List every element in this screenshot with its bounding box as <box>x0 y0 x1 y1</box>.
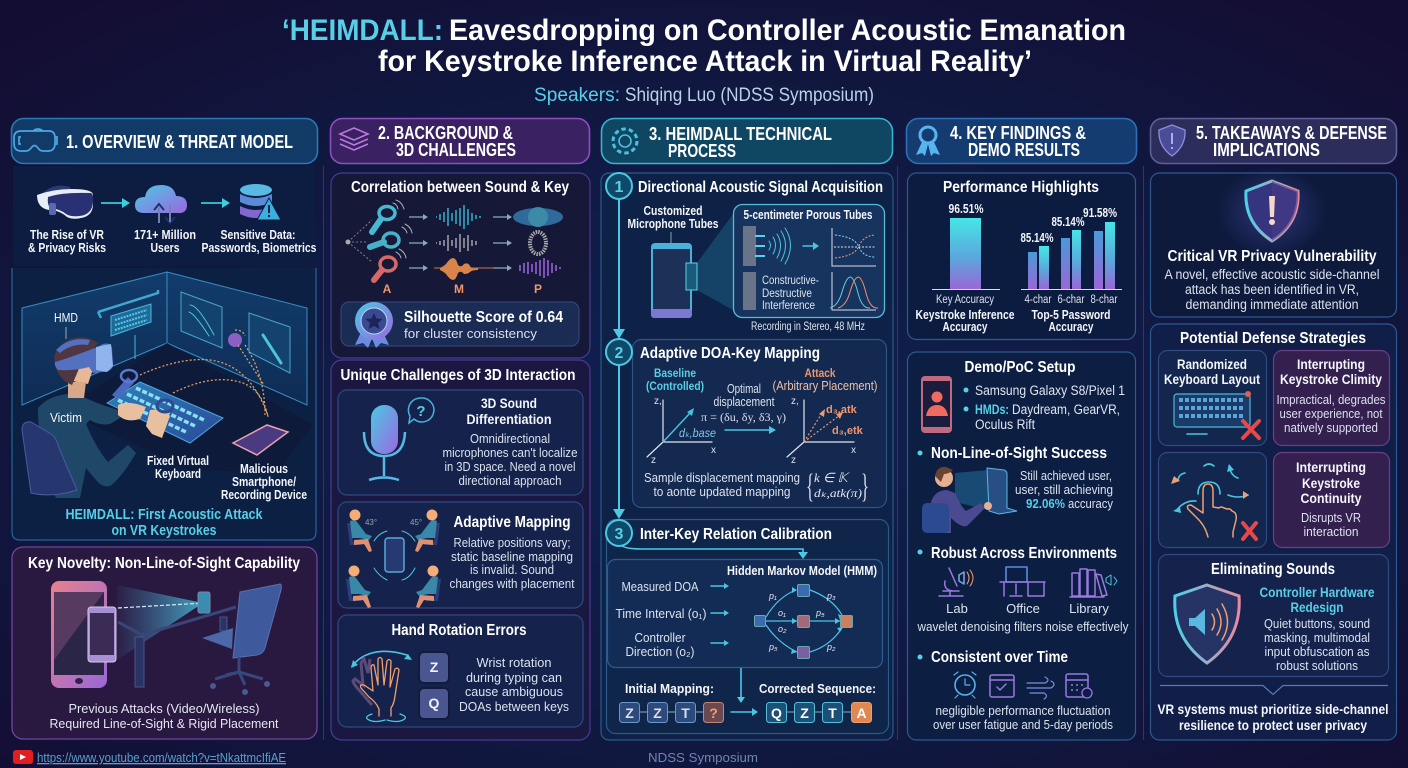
step 2: Attack <box>804 366 836 380</box>
panel: demo setup: accuracy <box>1068 496 1113 511</box>
panel: demo setup: Samsung Galaxy S8/Pixel 1 <box>975 383 1125 398</box>
icon: sound shield <box>1175 585 1239 663</box>
key sequence: Z <box>625 705 634 721</box>
step 1: Microphone Tubes <box>628 217 719 231</box>
chart: attack axes: x <box>851 445 856 456</box>
conclusion text: resilience to protect user privacy <box>1179 717 1367 733</box>
panel: demo setup: Consistent over Time <box>931 649 1068 666</box>
callout: silhouette score <box>341 302 579 348</box>
panel: critical vulnerability <box>1150 167 1396 317</box>
panel: performance highlights: Accuracy <box>942 320 988 334</box>
step 3: Time Interval (o₁) <box>616 607 706 621</box>
panel: demo setup: Lab <box>946 601 968 616</box>
step 2: π = (δu, δy, δ3, γ) <box>701 410 786 424</box>
panel: threat model scene: Keyboard <box>155 467 201 481</box>
card: keystroke climity: Impractical, degrades <box>1276 393 1386 407</box>
panel: correlation: M <box>454 282 464 296</box>
card: 3D sound: Differentiation <box>466 411 552 427</box>
table <box>118 607 236 635</box>
card: 3D sound: microphones can't localize <box>442 446 578 460</box>
person <box>38 337 170 498</box>
card: eliminating sounds <box>1158 554 1388 676</box>
diagram: porous tubes: Destructive <box>762 288 812 300</box>
card: randomized keyboard <box>1158 350 1266 446</box>
card: keystroke continuity: Keystroke <box>1302 476 1360 491</box>
card: adaptive mapping: changes with placement <box>450 577 575 591</box>
icon: attacker phone <box>921 376 952 433</box>
step 2: Sample displacement mapping <box>644 470 800 485</box>
step 3: Hidden Markov Model (HMM) <box>727 564 877 578</box>
footer link: https://www.youtube.com/watch?v=tNkattmcIfiAE <box>37 750 286 765</box>
card: adaptive mapping: 45° <box>410 518 422 527</box>
panel: key novelty: Previous Attacks (Video/Wireless) <box>68 701 260 716</box>
title: Shiqing Luo (NDSS Symposium) <box>625 85 874 106</box>
chart: password accuracy: 6-char <box>1058 294 1085 306</box>
card: keystroke continuity: Continuity <box>1300 491 1362 506</box>
chair <box>22 422 77 495</box>
chart: HMM graph: p₅ <box>815 608 825 618</box>
chart: baseline axes: z, <box>654 396 662 407</box>
icon: small phone <box>88 607 116 662</box>
title: for Keystroke Inference Attack in Virtual Reality’ <box>378 45 1032 78</box>
title: ‘HEIMDALL: <box>282 14 443 47</box>
step 3: 3 <box>615 526 624 543</box>
card: hand rotation <box>338 615 583 727</box>
panel: overview: & Privacy Risks <box>28 241 106 255</box>
column 4 header: DEMO RESULTS <box>968 140 1080 160</box>
card: randomized keyboard: Randomized <box>1177 357 1247 372</box>
card: keystroke continuity: Disrupts VR <box>1301 511 1361 525</box>
panel: technical process <box>601 173 893 740</box>
diagram: porous tubes: 5-centimeter Porous Tubes <box>744 208 873 222</box>
step 1: Customized <box>644 204 702 218</box>
card: randomized keyboard: Keyboard Layout <box>1164 372 1260 387</box>
panel: demo setup: Oculus Rift <box>975 417 1035 432</box>
chart: password accuracy: 4-char <box>1024 294 1052 306</box>
icon: hand <box>351 651 412 722</box>
column 4 header <box>906 118 1136 164</box>
icons: time <box>954 672 1092 699</box>
chart: attack axes: d₃,etk <box>832 425 864 437</box>
arrow <box>101 202 127 204</box>
panel: demo setup <box>908 352 1136 740</box>
panel: critical vulnerability: A novel, effective acoustic side-channel <box>1164 267 1380 282</box>
step 2: Optimal <box>727 382 761 396</box>
column 5 header <box>1150 118 1396 164</box>
icon: user looking at phone <box>922 467 1017 533</box>
card: eliminating sounds: robust solutions <box>1276 659 1358 673</box>
panel: demo setup: over user fatigue and 5-day periods <box>933 717 1113 732</box>
panel: threat model scene: HEIMDALL: First Acoustic Attack <box>66 507 263 523</box>
card: adaptive mapping: 43° <box>365 518 377 527</box>
chart: password accuracy: 85.14% <box>1052 215 1084 229</box>
step 1: Recording in Stereo, 48 MHz <box>751 321 865 333</box>
chart: HMM graph: p₅ <box>768 642 778 652</box>
panel: defense strategies: Potential Defense Strategies <box>1180 330 1366 347</box>
step 3: Measured DOA <box>622 580 699 594</box>
callout: silhouette score: Silhouette Score of 0.64 <box>404 309 563 326</box>
step 2: } <box>861 468 869 505</box>
panel: threat model scene <box>12 268 316 540</box>
step 3 <box>606 520 888 734</box>
diagram: porous tubes: Interference <box>762 300 815 312</box>
card: hand rotation: Q <box>429 695 440 711</box>
icon: office <box>1000 567 1045 596</box>
card: hand rotation: during typing can <box>466 670 562 685</box>
panel: unique challenges: Unique Challenges of 3D Interaction <box>340 367 576 384</box>
key sequence <box>620 702 872 722</box>
panel: demo setup: Still achieved user, <box>1020 468 1112 483</box>
column 3 header <box>602 118 892 164</box>
card: adaptive mapping <box>338 502 583 608</box>
card: adaptive mapping: static baseline mapping <box>451 550 573 564</box>
diagram: porous tubes: Constructive- <box>762 275 819 287</box>
step 2: (Controlled) <box>646 379 704 393</box>
step 2: Adaptive DOA-Key Mapping <box>640 345 820 362</box>
key sequence: T <box>681 705 690 721</box>
column 3 header: 3. HEIMDALL TECHNICAL <box>649 124 832 144</box>
card: eliminating sounds: Redesign <box>1290 600 1344 615</box>
column 2 header <box>330 118 590 164</box>
panel: demo setup: negligible performance fluctuation <box>936 703 1110 718</box>
card: eliminating sounds: Eliminating Sounds <box>1211 561 1335 578</box>
chart: keystroke accuracy <box>932 202 1000 306</box>
keyboard <box>107 382 223 443</box>
column 3 header: PROCESS <box>668 141 736 161</box>
column 4 header: 4. KEY FINDINGS & <box>950 123 1086 143</box>
panel: threat model scene: HMD <box>54 311 78 325</box>
panel: performance highlights: Top-5 Password <box>1032 308 1110 322</box>
step 2: to aonte updated mapping <box>654 484 790 499</box>
panel: demo setup: 92.06% <box>1026 496 1065 511</box>
chart: baseline axes <box>647 396 716 466</box>
key sequence: Z <box>653 705 662 721</box>
panel: demo setup: Library <box>1069 601 1109 616</box>
step 3: Direction (o₂) <box>626 645 694 659</box>
panel: demo setup: Robust Across Environments <box>931 545 1117 562</box>
card: hand rotation: Z <box>430 659 439 675</box>
panel: overview <box>13 166 317 266</box>
card: 3D sound: directional approach <box>458 474 562 488</box>
card: 3D sound: in 3D space. Need a novel <box>444 460 576 474</box>
step 2: 2 <box>615 345 624 362</box>
key sequence: Z <box>800 705 809 721</box>
waveforms <box>409 205 563 280</box>
panel: threat model scene: Smartphone/ <box>232 475 296 489</box>
card: hand rotation: Hand Rotation Errors <box>392 622 526 639</box>
controller panel <box>249 313 290 373</box>
panel: threat model scene: Fixed Virtual <box>147 454 209 468</box>
desk <box>60 343 313 472</box>
arrow <box>201 202 227 204</box>
panel: performance highlights: Accuracy <box>1048 320 1094 334</box>
walls <box>22 272 167 405</box>
column 2 header: 2. BACKGROUND & <box>378 123 513 143</box>
card: gesture icon <box>1158 452 1266 548</box>
panel: unique challenges <box>331 360 590 740</box>
panel: key novelty: Key Novelty: Non-Line-of-Sight Capability <box>28 555 300 572</box>
panel: correlation: Correlation between Sound & Key <box>351 179 569 196</box>
step 2: (Arbitrary Placement) <box>772 379 878 393</box>
card: hand rotation: Wrist rotation <box>476 655 552 670</box>
card: keystroke climity <box>1274 350 1390 446</box>
icon: cloud <box>135 185 187 223</box>
panel: demo setup: user, still achieving <box>1015 482 1113 497</box>
panel: critical vulnerability: Critical VR Privacy Vulnerability <box>1168 248 1377 265</box>
panel: threat model scene: on VR Keystrokes <box>112 523 216 539</box>
step 3: Corrected Sequence: <box>759 682 876 696</box>
step 3: Inter-Key Relation Calibration <box>640 526 832 543</box>
controller on wall <box>228 333 242 347</box>
callout: silhouette score: for cluster consistency <box>404 326 538 341</box>
footer source: NDSS Symposium <box>648 750 758 765</box>
key sequence: ? <box>709 705 718 721</box>
card: 3D sound: Omnidirectional <box>470 432 550 446</box>
chart: attack axes: z, <box>791 396 799 407</box>
icon: virtual keyboard on wall <box>98 290 158 359</box>
chair <box>202 584 281 695</box>
panel: demo setup: wavelet denoising filters noise effectively <box>917 619 1129 634</box>
title: Speakers: <box>534 85 620 106</box>
title <box>282 14 1126 106</box>
step 2: { <box>806 468 814 505</box>
chart: HMM graph: p₁ <box>768 591 777 601</box>
step 2: k ∈ 𝕂 <box>814 470 851 485</box>
panel: performance highlights: Keystroke Inference <box>916 308 1015 322</box>
step 2: displacement <box>714 395 775 409</box>
panel: overview: Sensitive Data: <box>220 228 296 242</box>
panel: demo setup: HMDs: <box>975 402 1009 417</box>
chart: HMM graph: p₃ <box>826 591 836 601</box>
panel: performance highlights: Performance Highlights <box>943 179 1099 196</box>
controllers <box>112 377 134 399</box>
panel: defense strategies <box>1150 324 1396 740</box>
chart: HMM graph: o₁ <box>778 608 786 618</box>
card: eliminating sounds: masking, multimodal <box>1264 631 1370 645</box>
panel: threat model scene: Recording Device <box>221 488 307 502</box>
card: adaptive mapping: is invalid. Sound <box>470 563 554 577</box>
column 1 header: 1. OVERVIEW & THREAT MODEL <box>66 132 293 152</box>
icon: controllers <box>346 200 412 280</box>
card: adaptive mapping: Relative positions vary; <box>454 536 570 550</box>
chart: attack axes: z <box>791 455 796 466</box>
card: keystroke climity: Keystroke Climity <box>1280 372 1382 387</box>
chart: HMM graph: o₂ <box>778 624 787 634</box>
chart: keystroke accuracy: 96.51% <box>948 202 984 216</box>
card: eliminating sounds: Controller Hardware <box>1260 585 1375 600</box>
panel: overview: Passwords, Biometrics <box>202 241 317 255</box>
icon: database warning <box>240 184 281 220</box>
panel: critical vulnerability: attack has been identified in VR, <box>1185 282 1359 297</box>
chart: baseline axes: x <box>711 445 716 456</box>
panel: threat model scene: Malicious <box>240 462 288 476</box>
card: eliminating sounds: input obfuscation as <box>1264 645 1370 659</box>
chart: HMM graph: p₂ <box>826 642 836 652</box>
card: keystroke climity: user experience, not <box>1280 407 1383 421</box>
chart: password accuracy: 85.14% <box>1020 231 1054 245</box>
panel: critical vulnerability: demanding immediate attention <box>1186 297 1358 312</box>
panel: demo setup: Office <box>1006 601 1040 616</box>
key sequence: T <box>828 705 837 721</box>
chart: password accuracy <box>1020 206 1122 306</box>
chart: attack axes <box>787 396 864 466</box>
step 2: Baseline <box>654 366 696 380</box>
icon: phone <box>651 214 733 318</box>
card: keystroke climity: Interrupting <box>1297 357 1365 372</box>
card: keystroke climity: natively supported <box>1284 421 1378 435</box>
card: 3D sound: ? <box>416 403 426 420</box>
column 1 header <box>12 118 318 164</box>
step 1: 1 <box>615 179 624 196</box>
card: eliminating sounds: Quiet buttons, sound <box>1264 617 1370 631</box>
chart: password accuracy: 91.58% <box>1083 206 1117 220</box>
panel: correlation: P <box>534 282 542 296</box>
step 1: Directional Acoustic Signal Acquisition <box>638 179 883 196</box>
column 5 header: IMPLICATIONS <box>1213 140 1320 160</box>
conclusion text <box>1158 701 1388 733</box>
card: hand rotation: DOAs between keys <box>459 699 569 714</box>
icon: lab <box>939 568 973 596</box>
step 2: dₖ,atk(π) <box>814 486 862 500</box>
panel: overview: Users <box>150 241 180 255</box>
panel: correlation: A <box>383 282 392 296</box>
card: hand rotation: cause ambiguous <box>465 684 563 699</box>
card: keystroke continuity: Interrupting <box>1296 460 1366 475</box>
card: keystroke continuity: interaction <box>1304 525 1359 539</box>
card: 3D sound: 3D Sound <box>481 395 537 411</box>
panel: key novelty: Required Line-of-Sight & Rigid Placement <box>50 716 279 731</box>
icon: VR headset <box>37 186 93 219</box>
hand panel <box>181 292 222 348</box>
card: adaptive mapping: Adaptive Mapping <box>454 514 570 531</box>
sound paths <box>140 360 268 417</box>
device <box>198 592 210 613</box>
icon: library <box>1070 569 1117 597</box>
chart: attack axes: d₃,atk <box>826 404 858 416</box>
key sequence: Q <box>771 705 782 721</box>
panel: threat model scene: Victim <box>50 411 82 425</box>
step 2 <box>606 339 886 519</box>
panel: overview: The Rise of VR <box>30 228 104 242</box>
chart: baseline axes: z <box>651 455 656 466</box>
panel: key novelty <box>12 547 317 739</box>
chart: HMM graph <box>754 584 852 658</box>
panel: overview: 171+ Million <box>134 228 196 242</box>
card: 3D sound <box>338 390 583 495</box>
panel: demo setup: Daydream, GearVR, <box>1012 402 1120 417</box>
panel: demo setup: Non-Line-of-Sight Success <box>931 445 1107 462</box>
light beam <box>117 585 203 660</box>
step 3: Controller <box>634 631 686 645</box>
key sequence: A <box>856 705 867 721</box>
column 2 header: 3D CHALLENGES <box>396 140 516 160</box>
panel: performance highlights <box>908 173 1136 340</box>
title: Eavesdropping on Controller Acoustic Emanation <box>449 14 1126 47</box>
panel: correlation <box>331 173 590 358</box>
step 3: Initial Mapping: <box>625 682 714 696</box>
panel: demo setup: Demo/PoC Setup <box>964 359 1076 376</box>
phone <box>233 425 288 455</box>
card: keystroke continuity <box>1274 452 1390 548</box>
icon: alert shield <box>1246 181 1298 241</box>
diagram: porous tubes <box>734 204 884 318</box>
chart: keystroke accuracy: Key Accuracy <box>936 294 994 306</box>
icon: large phone <box>51 581 107 688</box>
chart: baseline axes: dₖ,base <box>679 426 716 440</box>
chart: password accuracy: 8-char <box>1090 294 1118 306</box>
step 1 <box>606 173 884 339</box>
